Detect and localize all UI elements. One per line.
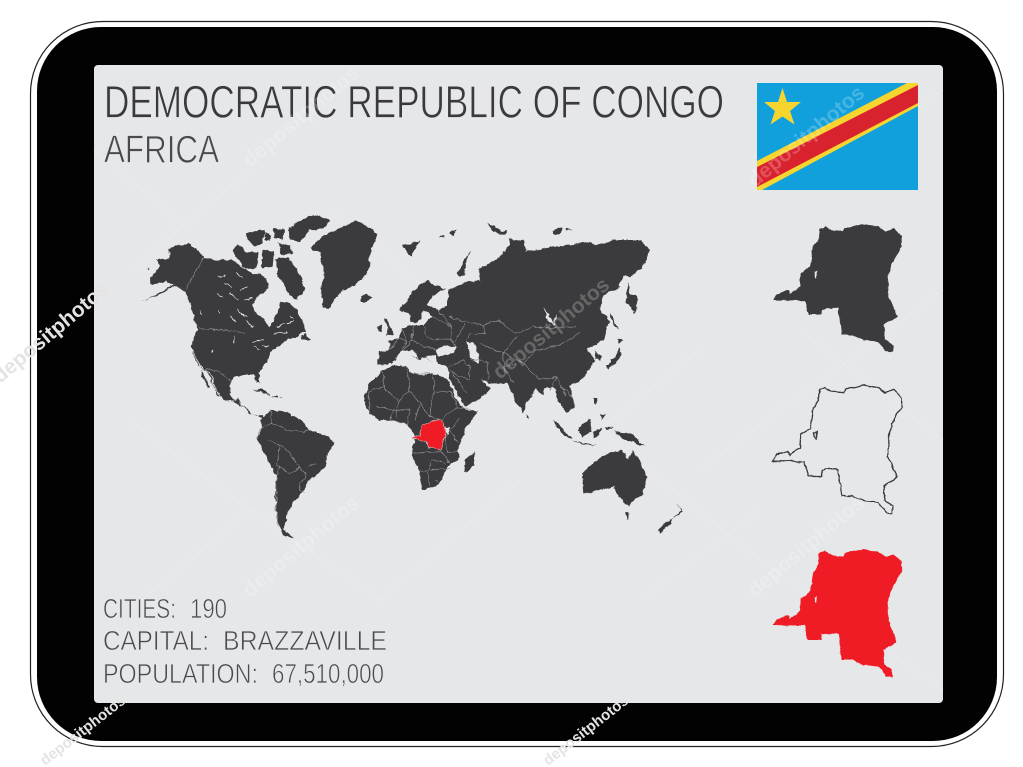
Canada lakes and inland water <box>200 273 293 353</box>
Java <box>572 440 597 445</box>
title: DEMOCRATIC REPUBLIC OF CONGO <box>104 76 724 128</box>
Arctic islands <box>403 222 572 288</box>
Borneo <box>577 418 592 437</box>
watermark text: depositphotos <box>238 491 364 602</box>
flag: yellow band <box>757 83 918 190</box>
Japan <box>606 312 623 369</box>
Sakhalin <box>626 283 638 314</box>
Eurasia <box>378 238 650 414</box>
Americas borders <box>186 257 317 527</box>
country silhouette: dark <box>773 224 902 352</box>
Taiwan, Philippines <box>594 397 606 419</box>
watermark text on white margin: depositphotos <box>37 692 129 767</box>
cities: 190 <box>190 593 227 624</box>
population <box>103 658 384 689</box>
watermark lines <box>94 90 943 690</box>
Iceland <box>360 295 372 302</box>
Old World <box>364 222 683 533</box>
flag: star <box>764 88 801 124</box>
Sri Lanka <box>527 414 530 418</box>
Baja California <box>201 369 210 388</box>
Alaska tip <box>147 258 167 270</box>
Madagascar <box>464 452 475 473</box>
DR Congo highlighted on world map <box>411 420 445 451</box>
South America <box>257 410 334 537</box>
Scandinavia <box>399 281 446 323</box>
world map <box>140 215 683 537</box>
Australia <box>582 449 647 506</box>
watermark text: depositphotos <box>488 273 614 384</box>
Arctic islands <box>232 215 330 301</box>
New Zealand <box>657 503 683 533</box>
inland seas <box>403 307 557 435</box>
New Guinea <box>615 431 645 447</box>
capital <box>103 625 387 656</box>
watermark text: depositphotos <box>743 81 869 192</box>
country silhouette: red <box>773 549 902 677</box>
Cuba and Caribbean <box>253 389 283 398</box>
watermark text: depositphotos <box>238 61 364 172</box>
population: 67,510,000 <box>272 658 384 689</box>
capital: CAPITAL: <box>103 625 209 656</box>
Tasmania <box>625 513 630 519</box>
flag: red band <box>757 85 918 187</box>
country borders <box>368 310 580 485</box>
flag <box>757 83 918 190</box>
watermark text <box>238 61 869 602</box>
Sulawesi <box>593 428 613 438</box>
watermark text: depositphotos <box>743 491 869 602</box>
North America <box>140 284 263 418</box>
Korea <box>594 350 602 362</box>
Americas <box>140 215 378 537</box>
screen panel <box>94 65 943 703</box>
cities: CITIES: <box>103 593 176 624</box>
statistics text <box>103 593 387 689</box>
Africa <box>364 365 477 490</box>
Greenland <box>310 221 378 309</box>
watermark text on white margin: depositphotos <box>540 692 632 767</box>
capital: BRAZZAVILLE <box>223 625 387 656</box>
Newfoundland <box>301 333 310 340</box>
subtitle: AFRICA <box>104 128 219 172</box>
population: POPULATION: <box>103 658 258 689</box>
Sumatra <box>553 420 572 438</box>
country silhouette: outline <box>773 385 902 513</box>
British Isles <box>377 318 393 335</box>
Hudson Bay <box>254 294 277 326</box>
watermark text on white margin <box>0 277 632 767</box>
